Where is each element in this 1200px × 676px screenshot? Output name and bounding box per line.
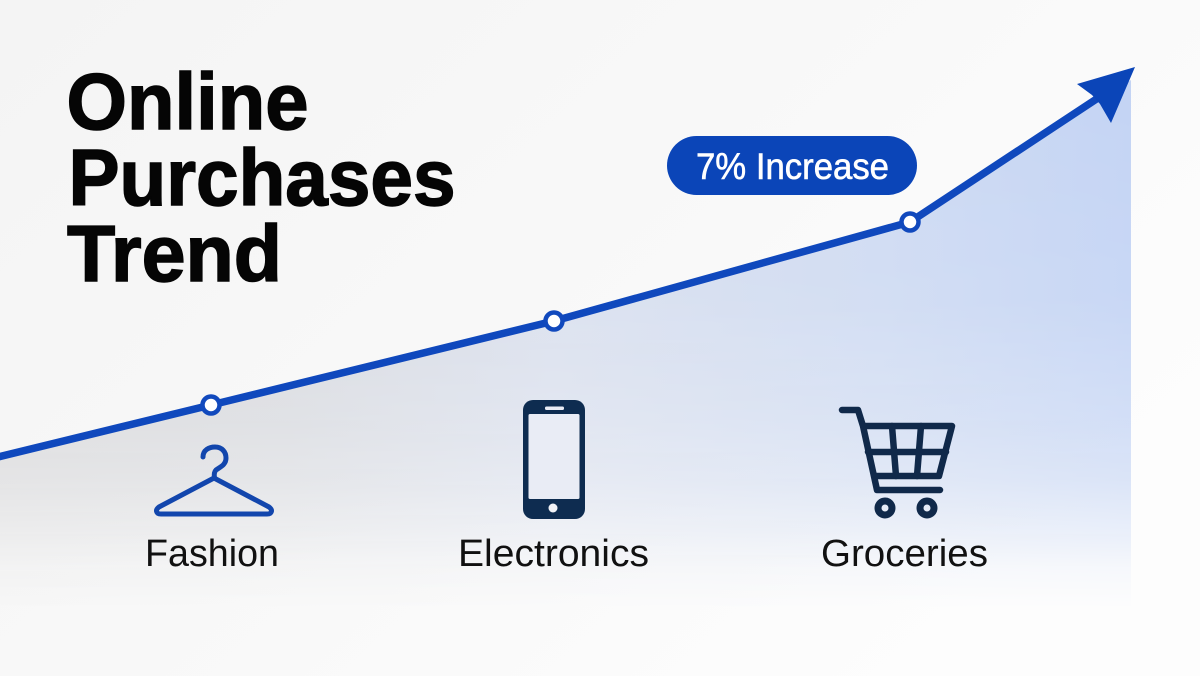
title: Purchases: [68, 133, 456, 222]
arrow head: [1077, 67, 1135, 123]
icon: shopping cart: [842, 410, 952, 515]
title: Online: [66, 57, 308, 146]
chart: shaded area under trend line: [0, 80, 1131, 564]
callout: 7% increase pill: [667, 136, 917, 195]
title: [66, 57, 456, 298]
trend line with arrow: [0, 67, 1135, 457]
label: electronics: Electronics: [458, 533, 649, 575]
callout: 7% increase pill: 7% Increase: [696, 146, 889, 187]
title: Trend: [67, 209, 282, 298]
icon: smartphone: [523, 400, 585, 519]
icon: clothes hanger: [157, 447, 271, 514]
label: fashion: Fashion: [145, 533, 279, 575]
data point: groceries: [902, 214, 918, 230]
label: groceries: Groceries: [821, 533, 988, 575]
data point: electronics: [546, 312, 562, 330]
data point: fashion: [202, 396, 220, 414]
